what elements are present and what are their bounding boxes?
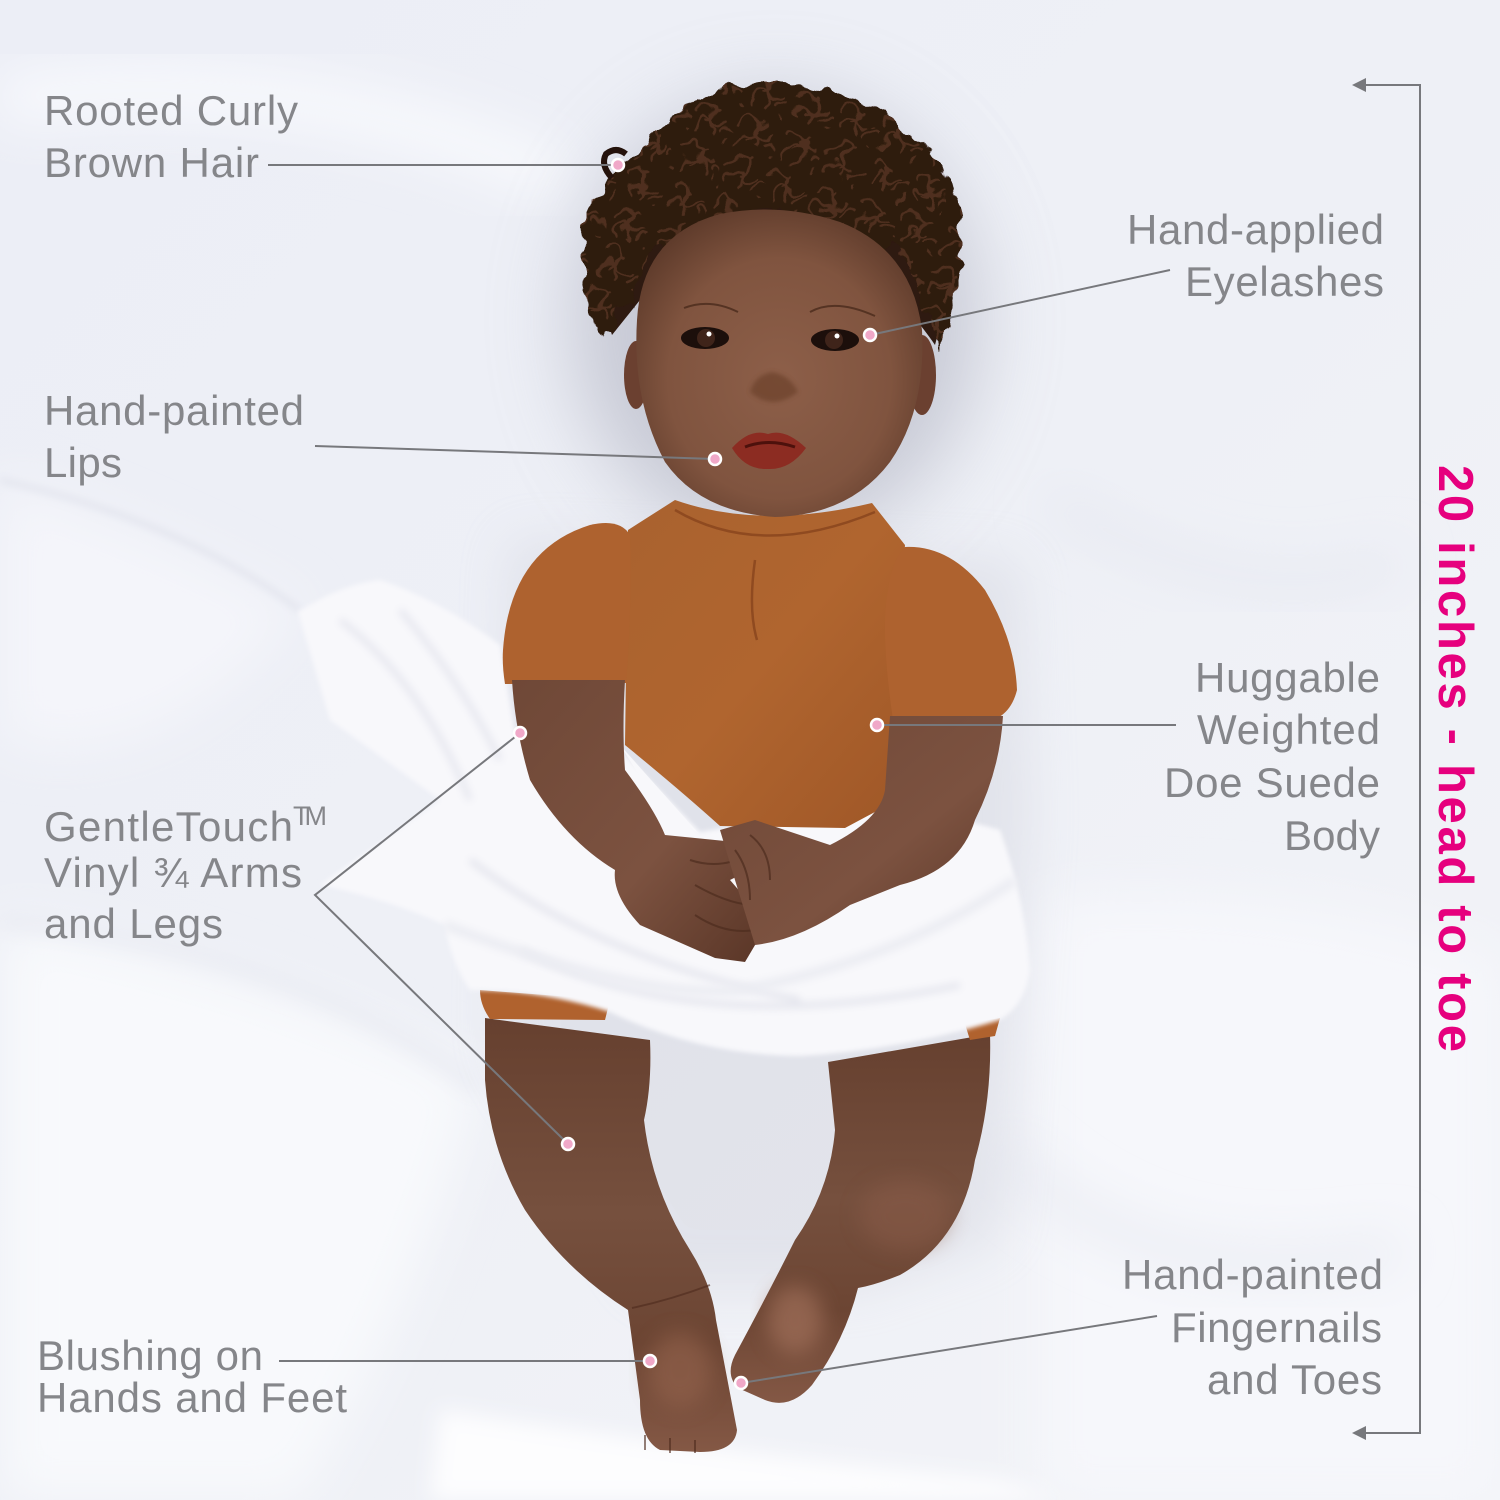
right leg [731,1034,990,1403]
right sleeve [885,547,1017,723]
annotation: hand-painted lips: Lips [44,439,122,486]
annotation: GentleTouch vinyl arms and legs: TM [293,801,327,831]
annotation: huggable weighted doe suede body: Doe Suede [1164,759,1380,806]
hair [582,82,962,348]
face [636,210,922,517]
height bracket arrow [1352,78,1420,1440]
annotation: huggable weighted doe suede body: Weighted [1197,706,1380,753]
annotation: GentleTouch vinyl arms and legs: and Legs [44,900,223,947]
annotation: hand-painted fingernails and toes: Fingernails [1171,1304,1382,1351]
annotation: rooted curly brown hair: Rooted Curly [44,87,298,134]
annotation: hand-painted lips: Hand-painted [44,387,304,434]
annotation: blushing on hands and feet [37,1332,656,1421]
annotation: rooted curly brown hair [44,87,624,186]
soft shadow around the body [500,540,1030,1290]
torso [620,500,905,835]
eyebrows [684,304,875,316]
right eye [811,329,859,351]
annotation: hand-painted fingernails and toes [735,1251,1383,1403]
orange shorts [480,990,1000,1040]
annotation: GentleTouch vinyl arms and legs [44,727,574,1150]
annotation: hand-applied eyelashes: Hand-applied [1127,206,1384,253]
annotation: huggable weighted doe suede body [871,654,1380,859]
annotation: blushing on hands and feet: Blushing on [37,1332,263,1379]
left sleeve [503,523,630,684]
annotation: hand-painted lips [44,387,721,486]
annotation: GentleTouch vinyl arms and legs: Vinyl ¾ Arms [44,849,302,896]
annotation: hand-painted fingernails and toes: Hand-painted [1122,1251,1383,1298]
annotation: rooted curly brown hair: Brown Hair [44,139,259,186]
annotation: huggable weighted doe suede body: Body [1284,812,1380,859]
annotation: huggable weighted doe suede body: Huggable [1195,654,1380,701]
annotation: GentleTouch vinyl arms and legs: GentleTouch [44,803,293,850]
annotation: hand-applied eyelashes [864,206,1384,341]
left arm and hand [512,680,760,962]
lips [732,433,806,469]
height label: 20 inches - head to toe [1428,465,1482,1052]
annotation: blushing on hands and feet: Hands and Feet [37,1374,347,1421]
ears [624,335,936,415]
left eye [681,327,729,349]
doll illustration [298,82,1030,1453]
annotation: hand-applied eyelashes: Eyelashes [1185,258,1384,305]
annotation: hand-painted fingernails and toes: and Toes [1207,1356,1382,1403]
nose [750,372,798,402]
right arm and hand [720,716,1003,945]
soft shadow around the head [570,95,980,545]
left leg [485,1018,737,1453]
white muslin wrap [298,580,1030,1056]
